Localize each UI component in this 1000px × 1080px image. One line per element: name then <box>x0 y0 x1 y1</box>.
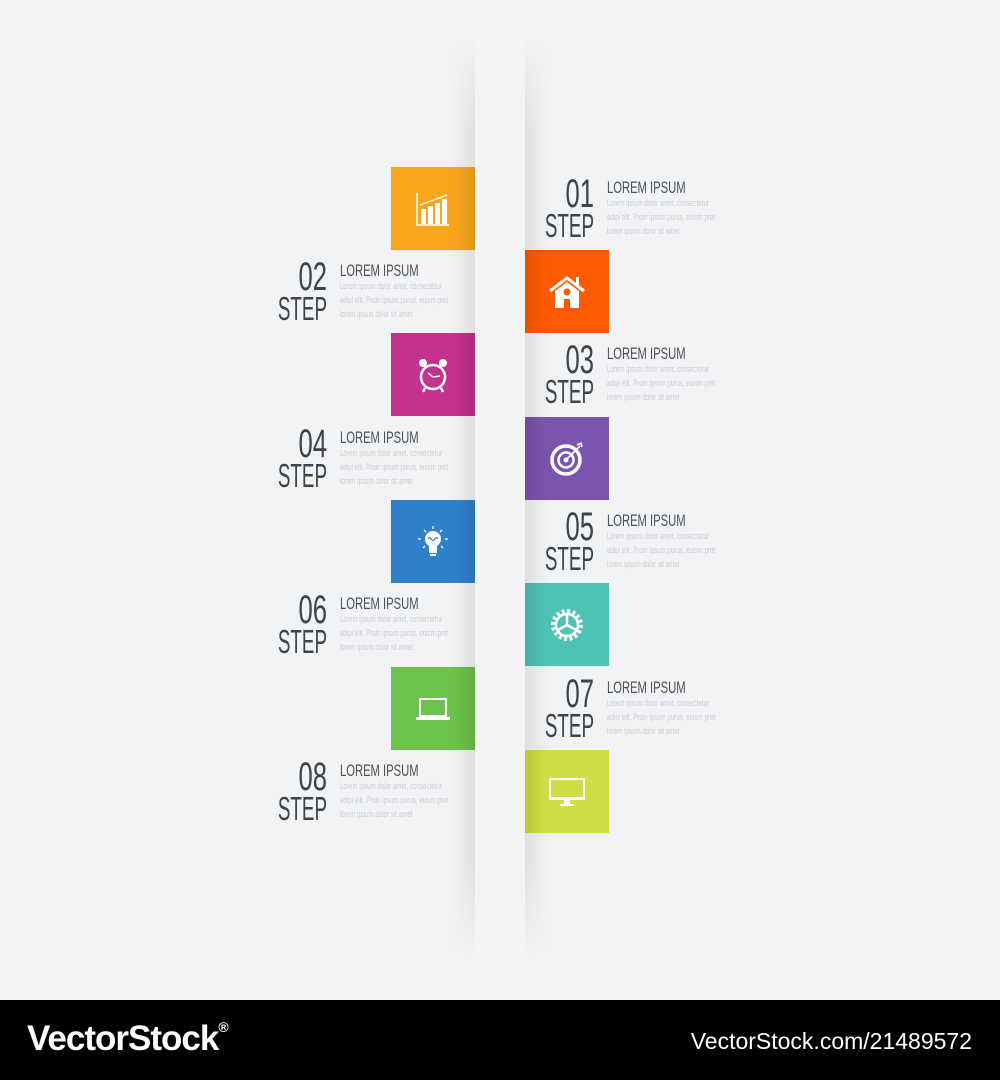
step 03 <box>545 338 715 410</box>
step 02: Lorem ipsum dolor amet, consectetur adipi elit. Proin ipsum purus, euism pret lorem ipsum dolor sit amet <box>340 281 448 320</box>
step 07: LOREM IPSUM <box>607 678 686 697</box>
step 04: Lorem ipsum dolor amet, consectetur adipi elit. Proin ipsum purus, euism pret lorem ipsum dolor sit amet <box>340 448 448 487</box>
step 07 <box>545 672 715 744</box>
footer logo: VectorStock® <box>27 1019 228 1058</box>
step 04: LOREM IPSUM <box>340 428 419 447</box>
text: 02 <box>299 255 327 299</box>
text: 05 <box>566 505 594 549</box>
step 06: LOREM IPSUM <box>340 594 419 613</box>
step 01: LOREM IPSUM <box>607 178 686 197</box>
box 6: gear icon <box>525 583 609 666</box>
box 7: laptop icon <box>391 667 475 750</box>
text: STEP <box>545 540 594 577</box>
center gap strip <box>475 0 525 1000</box>
step 02: LOREM IPSUM <box>340 261 419 280</box>
text: 06 <box>299 588 327 632</box>
box 1: chart icon <box>391 167 475 250</box>
step 01 <box>545 172 715 244</box>
footer url: VectorStock.com/21489572 <box>691 1028 972 1054</box>
text: STEP <box>545 373 594 410</box>
step 03: Lorem ipsum dolor amet, consectetur adipi elit. Proin ipsum purus, euism pret lorem ipsum dolor sit amet <box>607 364 715 403</box>
text: 03 <box>566 338 594 382</box>
step 05: Lorem ipsum dolor amet, consectetur adipi elit. Proin ipsum purus, euism pret lorem ipsum dolor sit amet <box>607 531 715 570</box>
text: 01 <box>566 172 594 216</box>
step 08: LOREM IPSUM <box>340 761 419 780</box>
text: 08 <box>299 755 327 799</box>
box 5: light bulb icon <box>391 500 475 583</box>
box 3: alarm clock icon <box>391 333 475 416</box>
text: STEP <box>278 457 327 494</box>
text: 07 <box>566 672 594 716</box>
box 8: monitor icon <box>525 750 609 833</box>
step 02 <box>278 255 448 327</box>
box 4: target icon <box>525 417 609 500</box>
text: STEP <box>278 790 327 827</box>
text: STEP <box>545 707 594 744</box>
step 05: LOREM IPSUM <box>607 511 686 530</box>
step 06 <box>278 588 448 660</box>
step 05 <box>545 505 715 577</box>
step 03: LOREM IPSUM <box>607 344 686 363</box>
step 07: Lorem ipsum dolor amet, consectetur adipi elit. Proin ipsum purus, euism pret lorem ipsum dolor sit amet <box>607 698 715 737</box>
text: 04 <box>299 422 327 466</box>
step 08: Lorem ipsum dolor amet, consectetur adipi elit. Proin ipsum purus, euism pret lorem ipsum dolor sit amet <box>340 781 448 820</box>
text: STEP <box>278 290 327 327</box>
step 01: Lorem ipsum dolor amet, consectetur adipi elit. Proin ipsum purus, euism pret lorem ipsum dolor sit amet <box>607 198 715 237</box>
step 04 <box>278 422 448 494</box>
step 06: Lorem ipsum dolor amet, consectetur adipi elit. Proin ipsum purus, euism pret lorem ipsum dolor sit amet <box>340 614 448 653</box>
footer bar <box>0 1000 1000 1080</box>
text: STEP <box>278 623 327 660</box>
text: STEP <box>545 207 594 244</box>
step 08 <box>278 755 448 827</box>
box 2: house icon <box>525 250 609 333</box>
